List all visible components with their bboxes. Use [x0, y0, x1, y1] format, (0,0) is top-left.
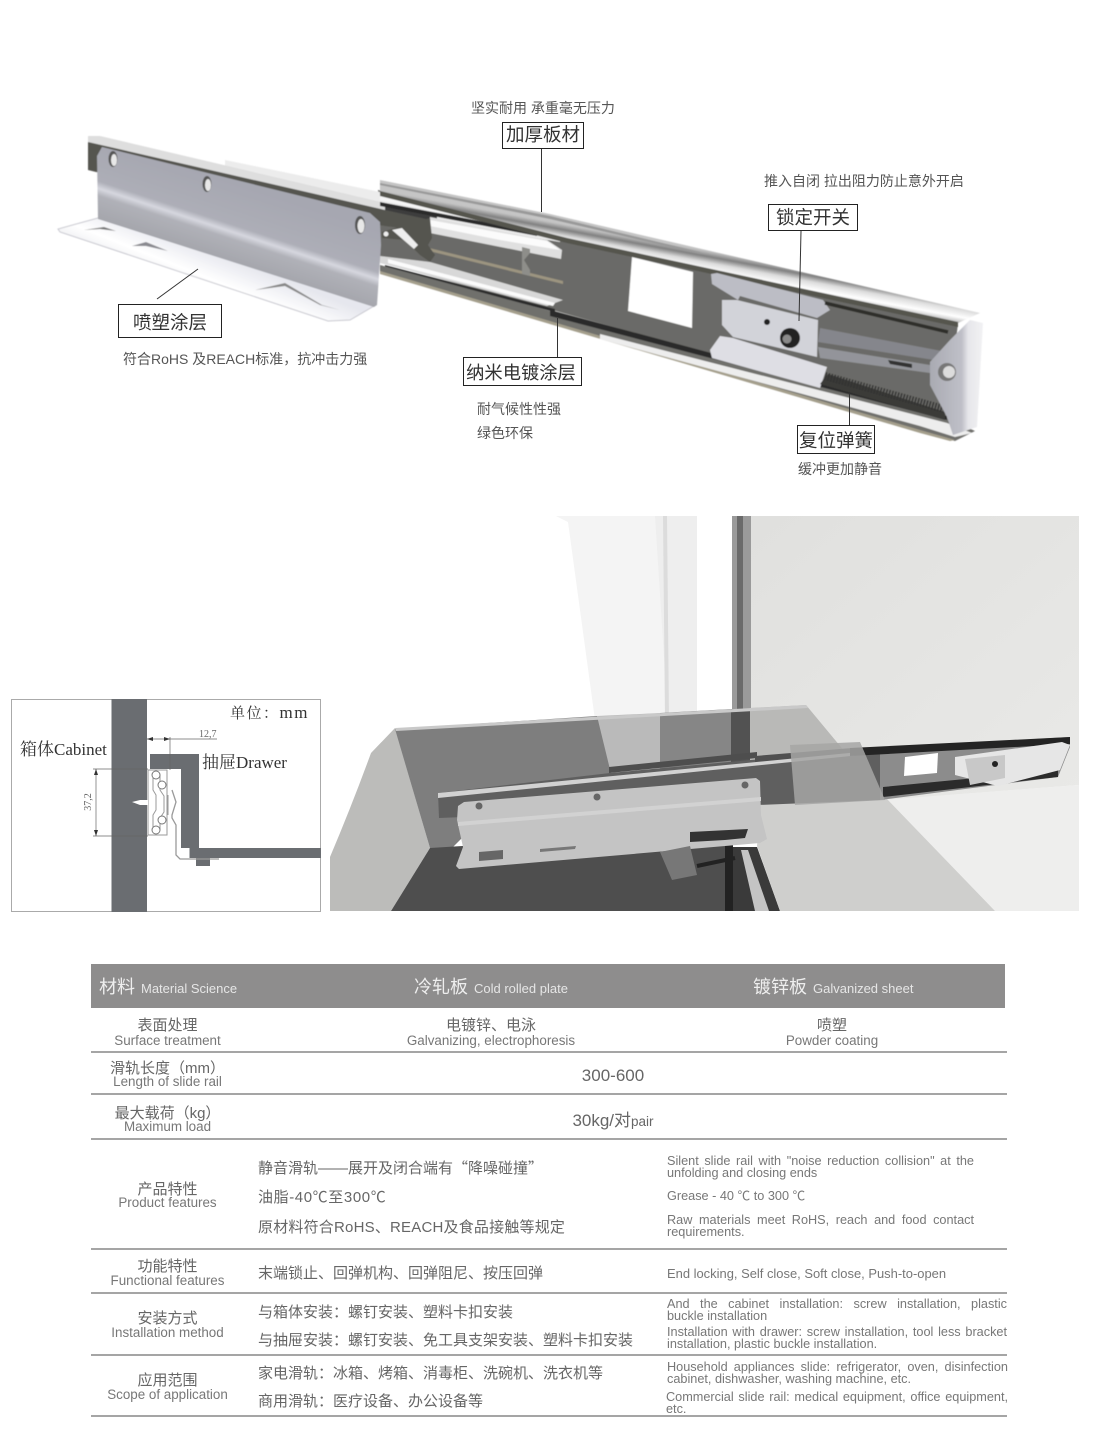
- table header: 冷轧板 Cold rolled plate: [414, 977, 568, 997]
- table header: 镀锌板 Galvanized sheet: [753, 977, 913, 997]
- back rail: [225, 160, 560, 242]
- row: surface treatment: Powder coating: [786, 1033, 878, 1048]
- row: product features: 油脂-40℃至300℃: [258, 1189, 386, 1206]
- row: surface treatment: 电镀锌、电泳: [446, 1017, 536, 1034]
- callout: lock switch: 锁定开关: [776, 207, 850, 228]
- row: product features: [91, 1140, 1007, 1250]
- table header: 材料 Material Science: [99, 977, 237, 997]
- callout: thick plate: 加厚板材: [506, 124, 580, 145]
- callout: lock switch: [764, 173, 964, 231]
- spec table: [91, 964, 1008, 1417]
- cross-section dimension diagram: 箱体Cabinet: [20, 740, 107, 759]
- row: product features: Product features: [118, 1195, 217, 1210]
- drawer floor: [391, 830, 725, 911]
- row: maximum load: 30kg/对pair: [572, 1111, 654, 1130]
- row: product features: Silent slide rail with "noise reduction collision" at the unfolding and closing ends: [667, 1154, 974, 1180]
- row: functional features: 功能特性: [137, 1258, 198, 1275]
- row: product features: Grease - 40 ℃ to 300 ℃: [667, 1189, 805, 1203]
- callout: return spring: [797, 425, 882, 477]
- callout: powder coating: 喷塑涂层: [133, 312, 207, 333]
- row: scope of application: [91, 1356, 1007, 1417]
- product hero: slide rail illustration: [57, 136, 982, 442]
- row: surface treatment: 表面处理: [137, 1017, 198, 1034]
- table header: [91, 964, 1005, 1008]
- row: surface treatment: 喷塑: [817, 1017, 847, 1034]
- inner bars: [430, 217, 562, 259]
- row: maximum load: 最大载荷（kg）: [115, 1105, 220, 1122]
- row: rail length: 滑轨长度（mm）: [110, 1060, 225, 1077]
- row: installation method: 安装方式: [137, 1310, 198, 1327]
- row: installation method: [91, 1294, 1007, 1356]
- callout: nano plating: 耐气候性性强: [477, 401, 561, 417]
- row: product features: 原材料符合RoHS、REACH及食品接触等规定: [258, 1219, 565, 1236]
- cross-section dimension diagram: 单位：mm: [230, 703, 309, 722]
- leader lines for hero callouts: [156, 149, 850, 425]
- row: scope of application: Scope of application: [107, 1387, 228, 1402]
- callout: powder coating: 符合RoHS 及REACH标准，抗冲击力强: [123, 351, 367, 367]
- row: rail length: 300-600: [582, 1066, 644, 1085]
- row: surface treatment: Surface treatment: [114, 1033, 221, 1048]
- row: scope of application: 商用滑轨：医疗设备、办公设备等: [258, 1393, 483, 1410]
- row: installation method: Installation method: [111, 1325, 224, 1340]
- row: maximum load: [91, 1095, 1007, 1140]
- row: rail length: Length of slide rail: [113, 1074, 222, 1089]
- callout: thick plate: [471, 100, 615, 149]
- callout: return spring: 缓冲更加静音: [798, 461, 882, 477]
- row: functional features: Functional features: [111, 1273, 224, 1288]
- cabinet column: [556, 516, 697, 720]
- drawer back wall: [395, 716, 620, 850]
- interior: [378, 190, 958, 420]
- slider: [711, 273, 830, 318]
- drawer left wall: [330, 728, 430, 911]
- row: surface treatment: Galvanizing, electrophoresis: [407, 1033, 575, 1048]
- row: maximum load: Maximum load: [124, 1119, 211, 1134]
- row: installation method: 与抽屉安装：螺钉安装、免工具支架安装、塑料卡扣安装: [258, 1332, 633, 1349]
- row: installation method: Installation with drawer: screw installation, tool less bracket installation, plastic buckle installation.: [667, 1325, 1007, 1351]
- callout: nano plating: 纳米电镀涂层: [466, 362, 576, 383]
- row: installation method: 与箱体安装：螺钉安装、塑料卡扣安装: [258, 1304, 513, 1321]
- row: scope of application: 应用范围: [137, 1372, 198, 1389]
- cross-section dimension diagram: 37,2: [83, 793, 94, 811]
- callout: powder coating: [118, 304, 367, 367]
- row: rail length: [91, 1053, 1007, 1095]
- cross-section dimension diagram: 抽屉Drawer: [202, 753, 287, 772]
- callout: return spring: 复位弹簧: [799, 430, 873, 451]
- row: product features: Raw materials meet RoHS, reach and food contact requirements.: [667, 1213, 974, 1239]
- row: functional features: [91, 1250, 1007, 1294]
- callout: lock switch: 推入自闭 拉出阻力防止意外开启: [764, 173, 964, 189]
- end cap: [930, 320, 983, 435]
- callout: nano plating: 绿色环保: [477, 425, 533, 441]
- row: installation method: buckle installation: [667, 1309, 767, 1323]
- cross-section dimension diagram: [11, 699, 321, 912]
- cylinder: [380, 180, 980, 323]
- row: product features: 静音滑轨——展开及闭合端有“降噪碰撞”: [258, 1157, 543, 1178]
- bracket: [456, 778, 767, 869]
- row: surface treatment: [91, 1008, 1007, 1053]
- row: installation method: And the cabinet installation: screw installation, plastic: [667, 1297, 1007, 1311]
- row: product features: 产品特性: [137, 1181, 198, 1198]
- rail: [438, 748, 880, 818]
- callout: thick plate: 坚实耐用 承重毫无压力: [471, 100, 615, 116]
- row: scope of application: 家电滑轨：冰箱、烤箱、消毒柜、洗碗机、洗衣机等: [258, 1365, 603, 1382]
- callout: nano plating: [463, 357, 582, 441]
- row: functional features: End locking, Self close, Soft close, Push-to-open: [667, 1266, 946, 1281]
- wall: [751, 516, 1079, 800]
- glass over column: [597, 713, 660, 790]
- row: scope of application: Household appliances slide: refrigerator, oven, disinfection cabinet, dishwasher, washing machine, etc.: [667, 1360, 1008, 1386]
- lower rail: [380, 265, 975, 441]
- cross-section dimension diagram: 12,7: [199, 729, 216, 740]
- bracket: [58, 218, 377, 321]
- row: scope of application: Commercial slide rail: medical equipment, office equipment, etc.: [666, 1390, 1008, 1416]
- row: functional features: 末端锁止、回弹机构、回弹阻尼、按压回弹: [258, 1265, 543, 1282]
